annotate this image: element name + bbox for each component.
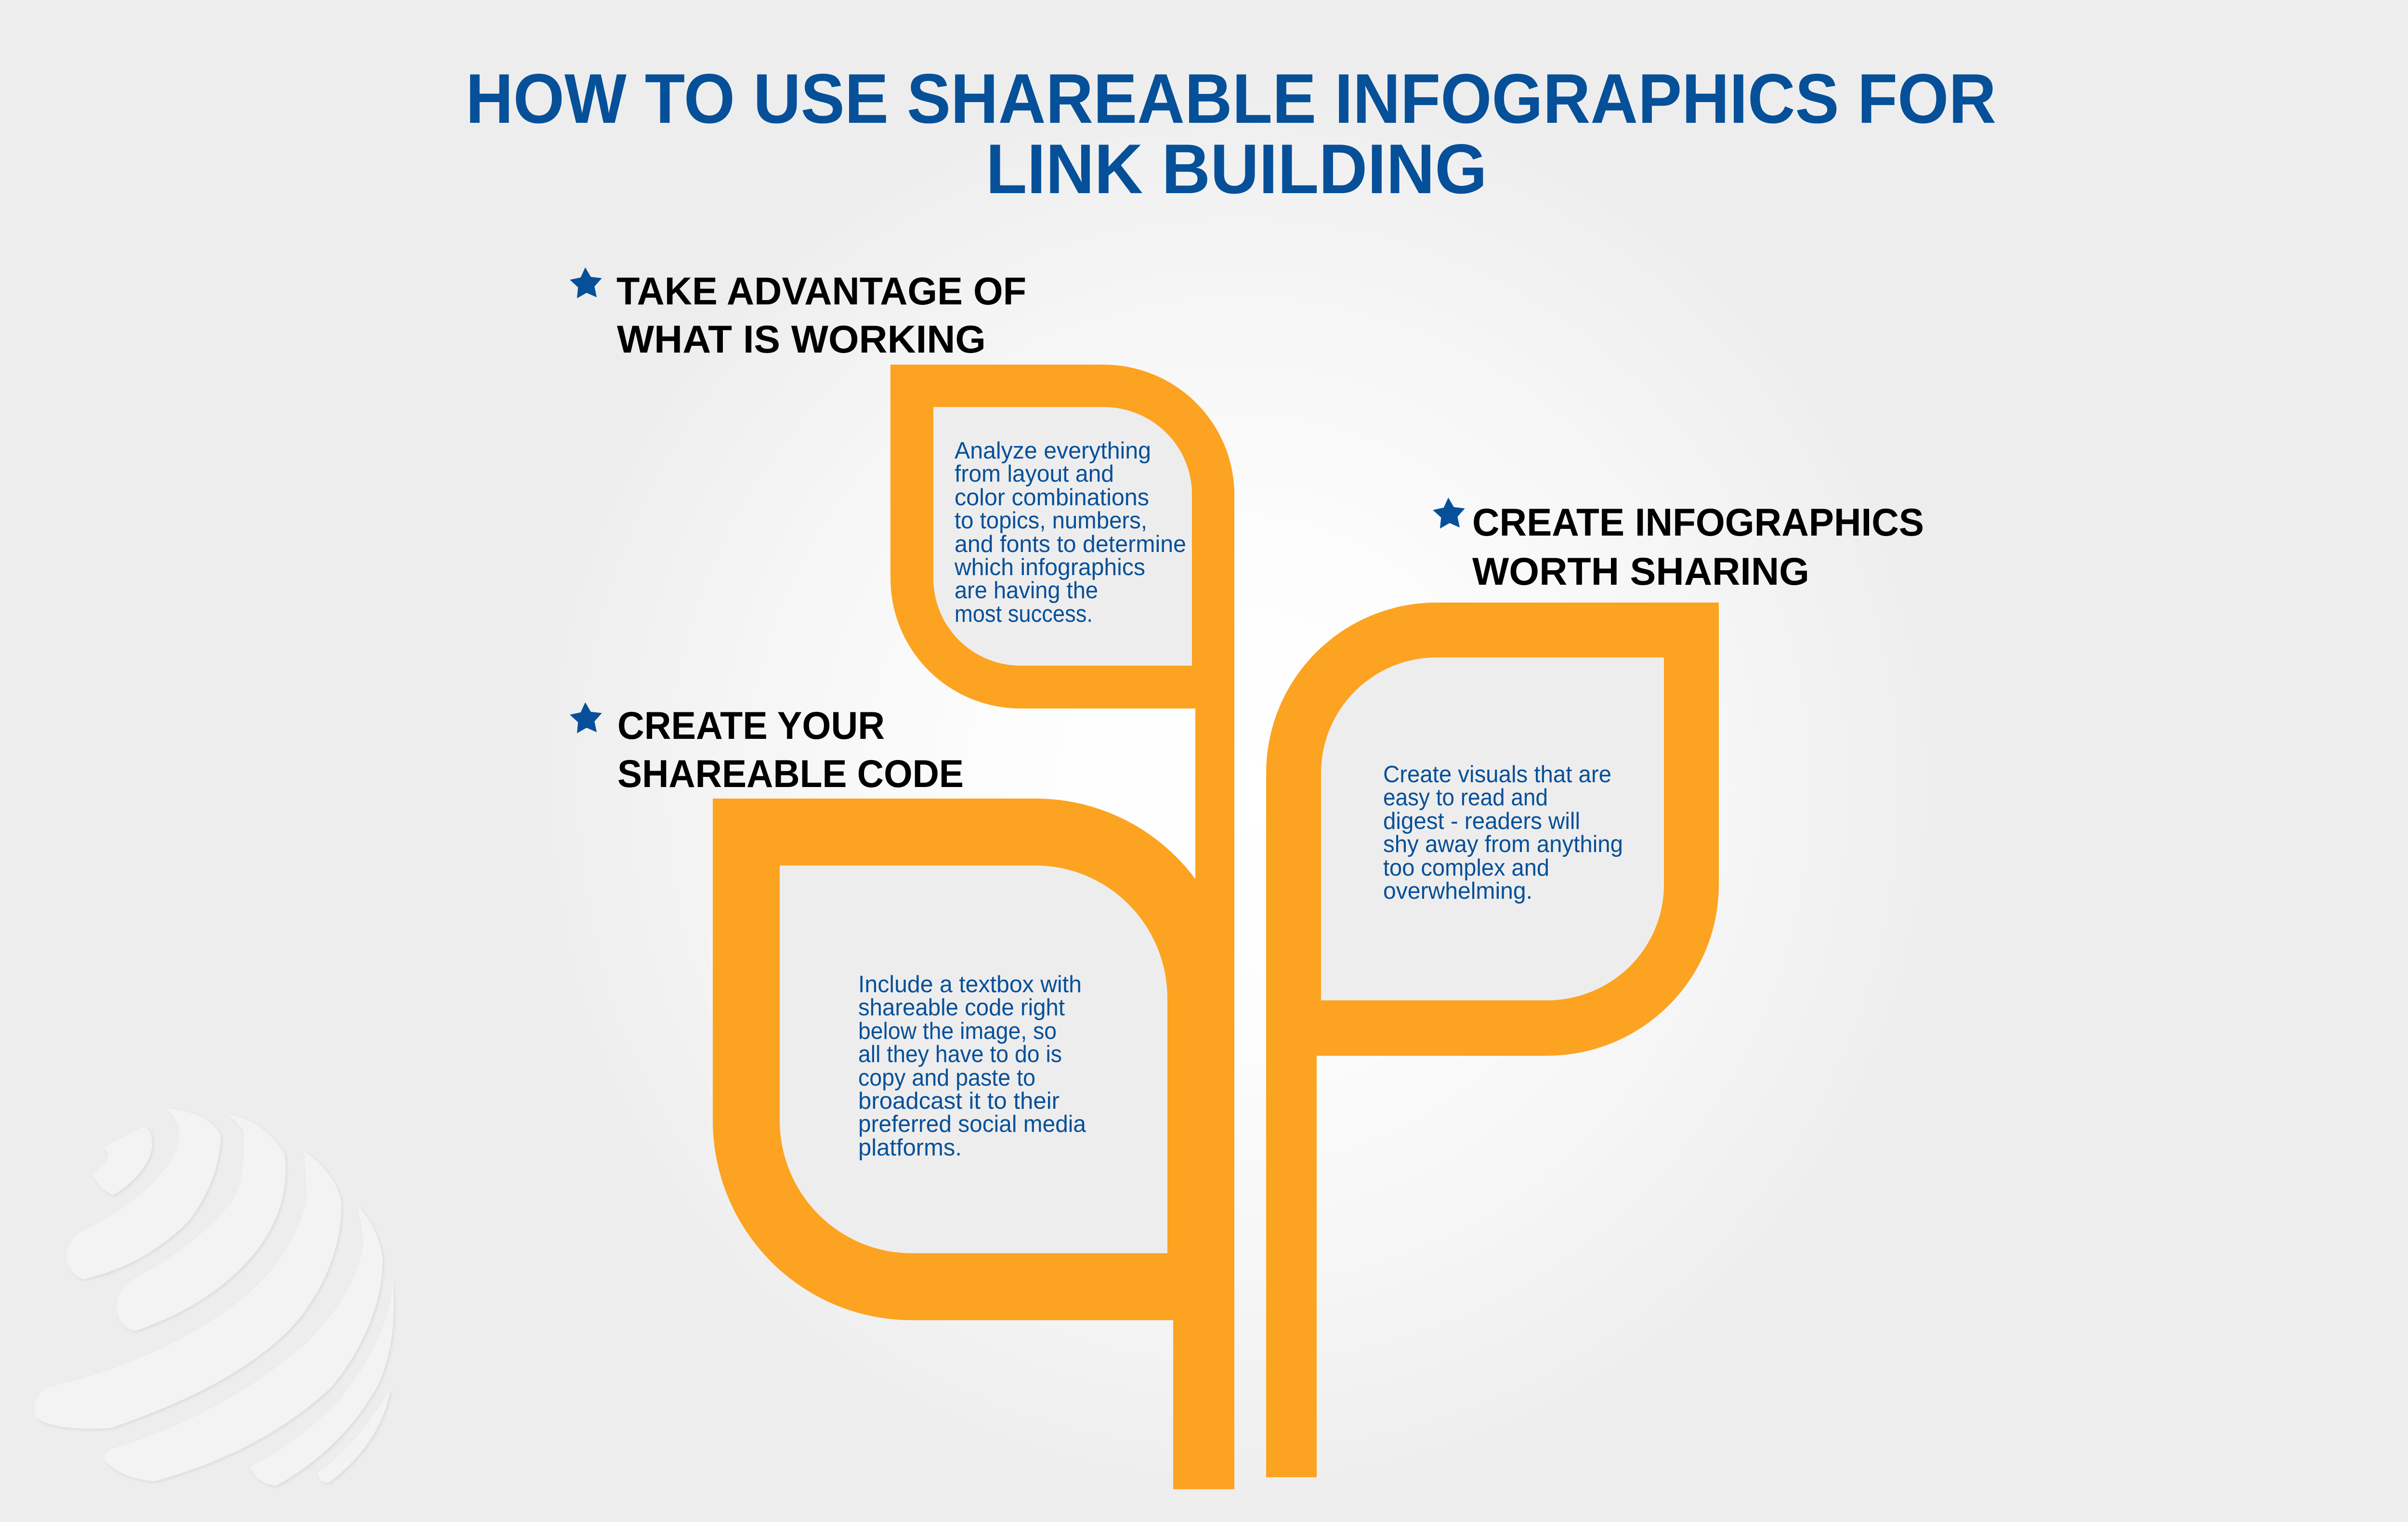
text block: broadcast it to their	[858, 1088, 1060, 1114]
panel: create your shareable code	[570, 702, 1167, 1253]
heading: WORTH SHARING	[1472, 550, 1809, 593]
text block: shareable code right	[858, 995, 1065, 1021]
plant stem with left leaves	[713, 365, 1234, 1489]
heading: CREATE YOUR	[617, 704, 885, 748]
text block: Include a textbox with	[858, 971, 1082, 997]
text block: copy and paste to	[858, 1065, 1035, 1091]
heading: WHAT IS WORKING	[617, 318, 986, 361]
leaf interior	[1321, 657, 1664, 1000]
heading: CREATE INFOGRAPHICS	[1472, 501, 1924, 544]
text block	[858, 971, 1086, 1161]
text block: are having the	[955, 577, 1098, 604]
title: HOW TO USE SHAREABLE INFOGRAPHICS FOR	[466, 59, 1996, 138]
text block: and fonts to determine	[955, 531, 1186, 557]
text block: all they have to do is	[858, 1041, 1062, 1067]
icon: star	[1433, 498, 1465, 528]
text block: Create visuals that are	[1383, 761, 1611, 787]
heading	[616, 270, 1026, 361]
text block: easy to read and	[1383, 785, 1548, 811]
icon: star	[570, 702, 602, 733]
text block: shy away from anything	[1383, 831, 1623, 857]
text block	[954, 438, 1186, 627]
heading	[617, 704, 964, 796]
text block: which infographics	[954, 554, 1145, 580]
icon: star	[570, 267, 602, 298]
text block: to topics, numbers,	[955, 508, 1147, 534]
text block: below the image, so	[858, 1018, 1057, 1044]
title	[466, 59, 1996, 208]
text block: digest - readers will	[1383, 808, 1580, 834]
heading	[1472, 501, 1924, 593]
text block: color combinations	[955, 485, 1149, 511]
leaf interior	[780, 866, 1167, 1253]
text block: platforms.	[858, 1135, 962, 1161]
heading: TAKE ADVANTAGE OF	[616, 270, 1026, 313]
text block: too complex and	[1383, 855, 1549, 881]
icon: faint globe watermark	[35, 1108, 394, 1486]
text block: overwhelming.	[1383, 878, 1532, 904]
title: LINK BUILDING	[986, 130, 1487, 208]
text block	[1383, 761, 1623, 904]
text block: most success.	[955, 601, 1093, 627]
heading: SHAREABLE CODE	[617, 752, 964, 796]
panel: create infographics worth sharing	[1321, 498, 1924, 1000]
leaf interior	[933, 407, 1192, 666]
plant stem with right leaf	[1266, 603, 1719, 1477]
text block: from layout and	[955, 461, 1114, 487]
text block: preferred social media	[858, 1111, 1086, 1137]
text block: Analyze everything	[955, 438, 1151, 464]
panel: take advantage of what is working	[570, 267, 1192, 666]
